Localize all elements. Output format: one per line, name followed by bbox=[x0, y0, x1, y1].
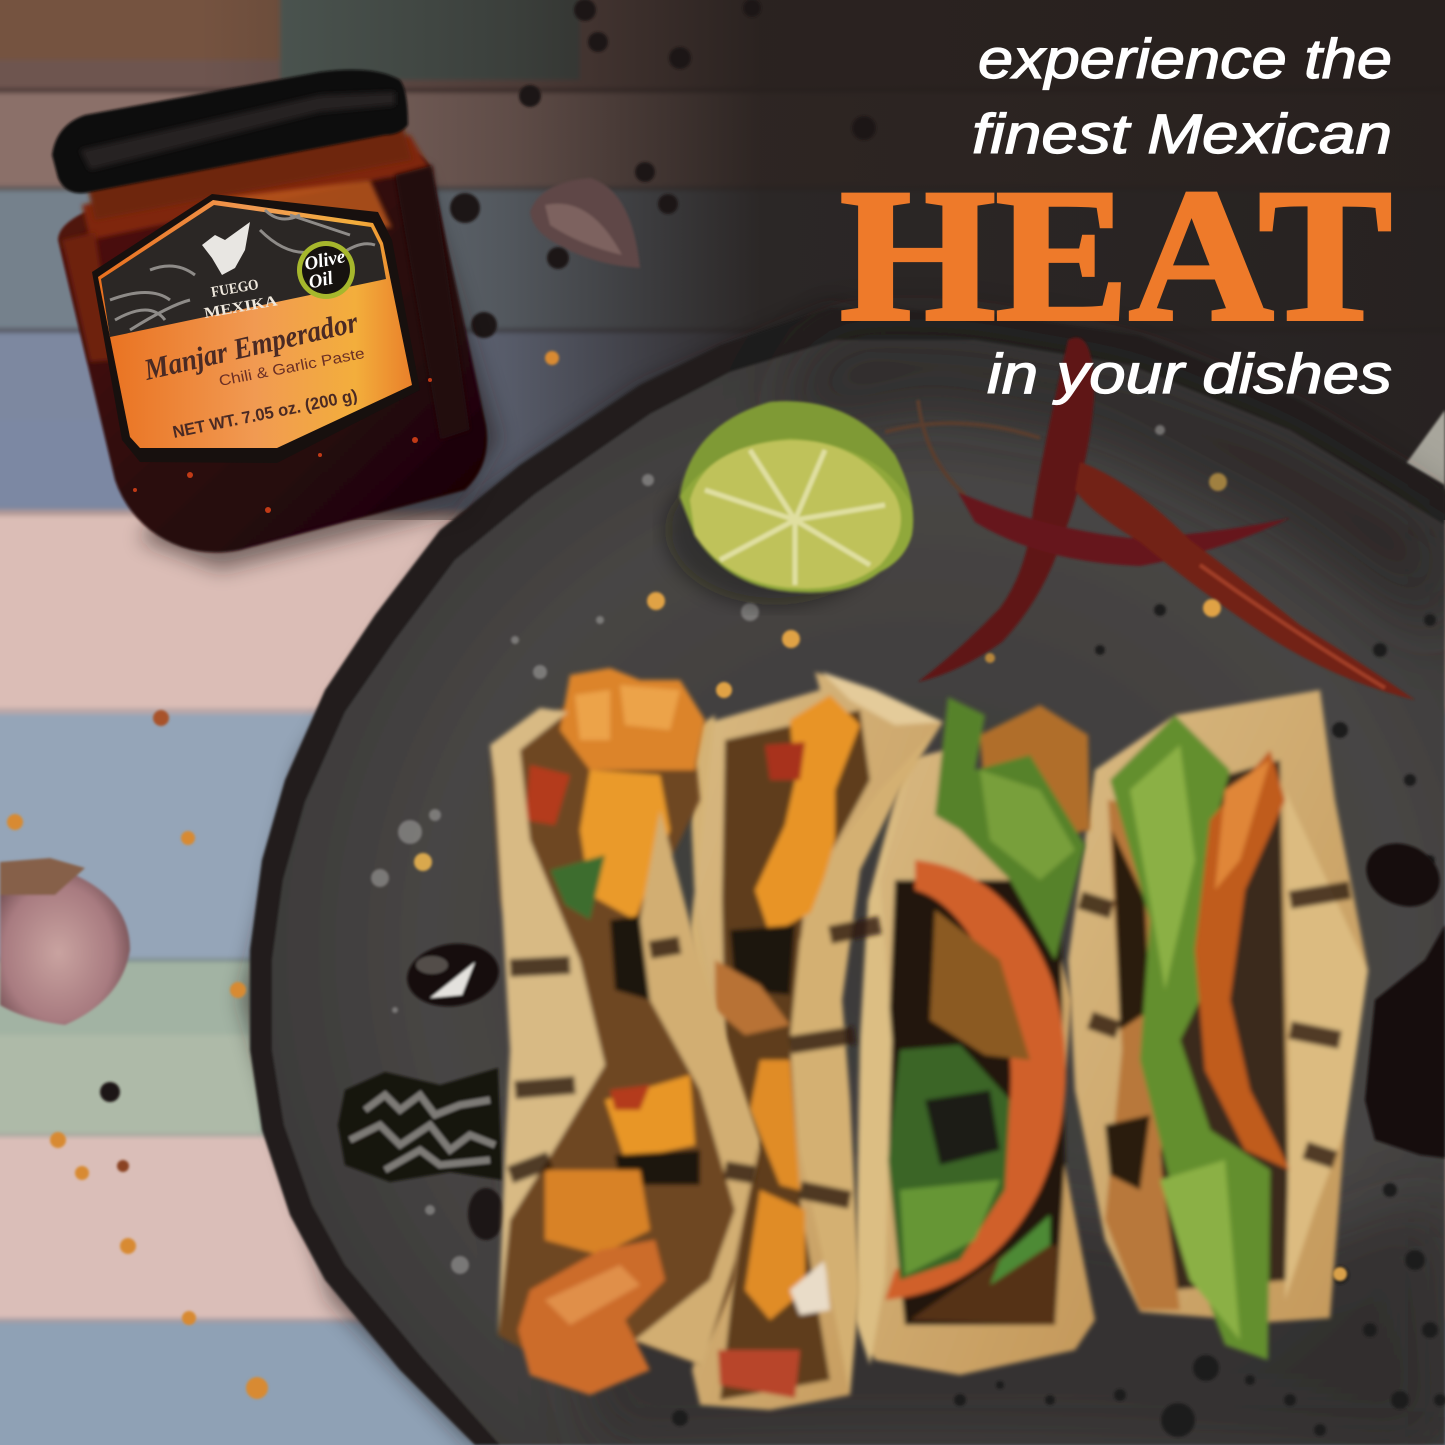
taco 2 sauce bbox=[755, 695, 860, 935]
taco 2 char bbox=[730, 925, 795, 995]
dried chili peppers bbox=[885, 338, 1415, 700]
lime wedge bbox=[665, 401, 913, 605]
jar body bbox=[58, 150, 487, 552]
Fuego Mexika text bbox=[203, 277, 279, 322]
taco 4 bbox=[1068, 690, 1368, 1360]
taco 3 lower lettuce bbox=[888, 1045, 1010, 1280]
product name: Manjar Emperador bbox=[140, 306, 361, 387]
taco 2 bbox=[690, 672, 943, 1410]
jar lid bbox=[52, 70, 408, 193]
taco 3 bottom meat bbox=[910, 1245, 1058, 1325]
taco 4 inner shadow bbox=[1135, 760, 1290, 1290]
taco 1 right fold bbox=[635, 810, 760, 1365]
jar bottom flecks bbox=[133, 378, 432, 513]
taco 3 bbox=[855, 697, 1095, 1375]
taco 2 char marks bbox=[790, 925, 880, 1200]
taco 1 char bbox=[610, 915, 700, 1185]
plate shadow bbox=[240, 305, 1445, 1445]
label chili sketch bbox=[110, 210, 375, 330]
olive oil badge: Olive bbox=[303, 246, 348, 275]
taco 2 tomato bbox=[718, 1350, 800, 1398]
taco 1 top shrimp bbox=[560, 668, 705, 770]
jar label bbox=[92, 194, 420, 463]
taco 2 left fold bbox=[690, 715, 758, 1265]
jar upper glass glow bbox=[82, 135, 432, 240]
peppercorns bbox=[100, 0, 876, 1102]
taco 1 left fold bbox=[490, 708, 605, 1335]
taco 4 lettuce bbox=[1110, 715, 1270, 1360]
taco 1 bbox=[490, 668, 760, 1395]
taco 3 top filling bbox=[980, 705, 1090, 840]
taco 1 bottom shrimp bbox=[545, 1170, 650, 1255]
sauce drop bbox=[403, 938, 503, 1012]
taco 4 right fold bbox=[1285, 790, 1368, 1300]
headline line 2: finest Mexican bbox=[972, 102, 1392, 165]
taco 4 tomato bbox=[1195, 750, 1290, 1170]
dark sauce right bbox=[1356, 832, 1445, 1158]
chili seeds and peppercorns bbox=[7, 351, 1347, 1399]
Fuego Mexika text: FUEGO bbox=[210, 277, 260, 301]
dark top-right overlay bbox=[200, 0, 1445, 520]
taco 3 inner bbox=[885, 880, 1065, 1325]
garlic clove top bbox=[530, 178, 640, 268]
product descriptor: Chili & Garlic Paste bbox=[218, 345, 366, 390]
headline line 1: experience the bbox=[978, 27, 1392, 90]
Fuego Mexika text: MEXIKA bbox=[203, 293, 279, 322]
taco 3 fold bbox=[855, 755, 915, 1365]
taco 3 upper lettuce bbox=[935, 697, 1085, 960]
taco 1 tomato and greens bbox=[525, 765, 650, 1110]
plate light flecks bbox=[371, 425, 1165, 1274]
headline HEAT: HEAT bbox=[840, 151, 1392, 361]
taco 2 front fold bbox=[790, 725, 940, 1395]
dark sauce smear left bbox=[338, 1068, 504, 1240]
taco 4 left strip bbox=[1105, 800, 1180, 1310]
jar side glass bbox=[62, 232, 115, 362]
taco 3 tomato slice bbox=[885, 860, 1066, 1300]
net weight: NET WT. 7.05 oz. (200 g) bbox=[171, 386, 359, 442]
logo eagle bbox=[202, 222, 250, 275]
taco 2 filling base bbox=[720, 710, 870, 1400]
olive oil badge: Oil bbox=[307, 268, 336, 293]
taco 4 char marks bbox=[1080, 890, 1350, 1160]
garlic bulb bbox=[0, 858, 130, 1025]
paper corner bbox=[1405, 410, 1445, 490]
taco 1 char marks bbox=[510, 945, 755, 1175]
olive oil badge bbox=[297, 241, 355, 299]
taco 1 middle sauce bbox=[580, 770, 670, 920]
headline bbox=[840, 27, 1392, 405]
jar of chili and garlic paste bbox=[52, 70, 500, 570]
jar shadow bbox=[140, 170, 500, 570]
plate speckles bbox=[672, 604, 1445, 1437]
plate bbox=[250, 308, 1445, 1445]
headline line 4: in your dishes bbox=[987, 342, 1392, 405]
